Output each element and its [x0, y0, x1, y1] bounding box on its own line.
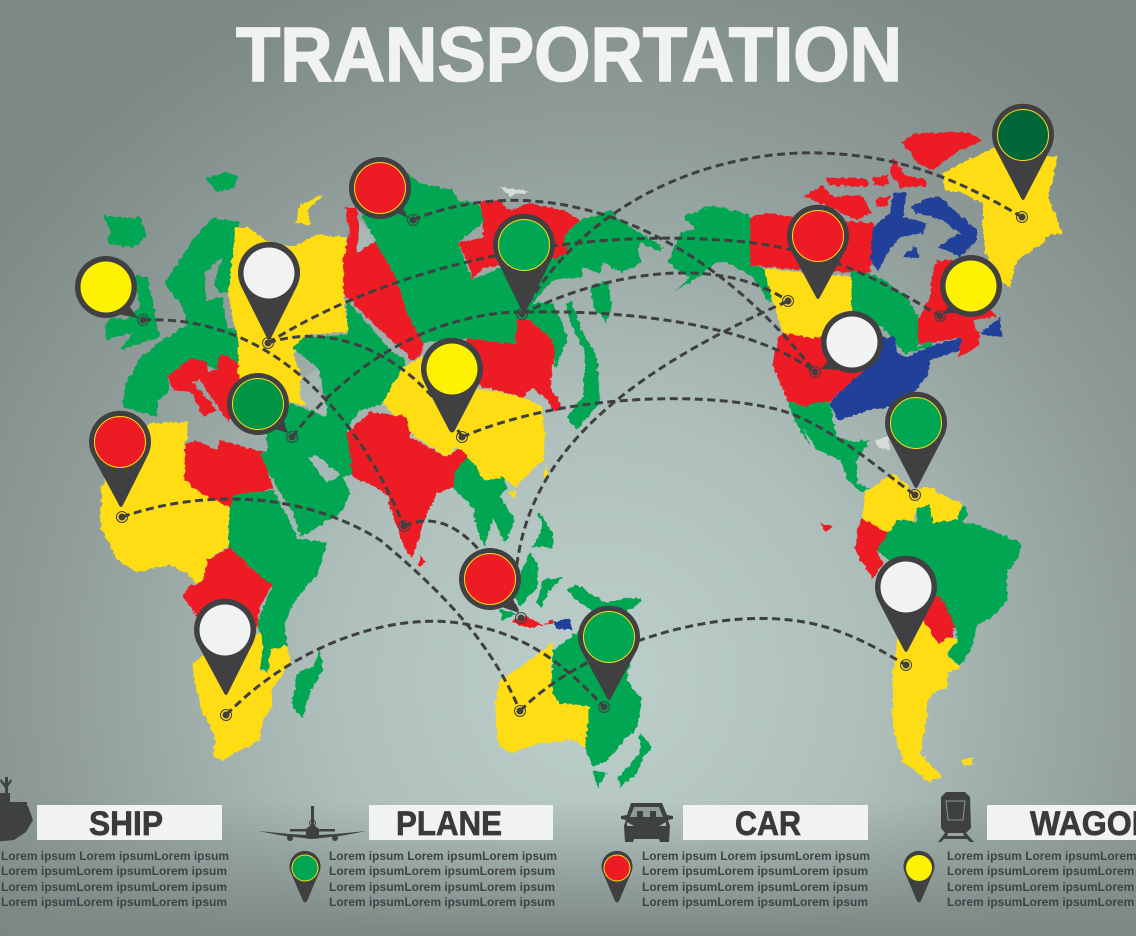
text block: car: Lorem ipsumLorem ipsumLorem ipsum: [642, 895, 868, 909]
pin: yellow Quebec: [940, 255, 1002, 317]
region: Australia west yellow: [495, 642, 590, 753]
region: Peru red: [821, 518, 888, 580]
route lines: [122, 153, 1022, 715]
pin: red legend: [601, 851, 632, 902]
pin: green Russia: [493, 214, 555, 313]
region: USA east blue: [830, 337, 962, 420]
region: USA west red: [773, 333, 867, 407]
region: Mexico green: [787, 400, 870, 493]
pin: red Indonesia: [459, 548, 521, 613]
region: Indonesia and islands: [500, 463, 642, 630]
region: Brazil green: [877, 505, 1020, 667]
legend: ship: [0, 777, 229, 909]
title: TRANSPORTATION: [236, 12, 902, 98]
text block: ship: Lorem ipsumLorem ipsumLorem ipsum: [1, 895, 227, 909]
region: North Africa red: [185, 440, 273, 508]
text block: car: Lorem ipsumLorem ipsumLorem ipsum: [642, 864, 868, 878]
pin: white South America: [875, 556, 937, 652]
text block: plane: Lorem ipsumLorem ipsumLorem ipsum: [329, 864, 555, 878]
region: Canada central yellow: [763, 268, 853, 338]
region: Siberia and Far East green: [362, 160, 663, 370]
region: southern Europe red: [167, 353, 240, 422]
pin: red Canada: [787, 205, 849, 299]
region: Southern Africa yellow: [193, 633, 291, 760]
region: Greenland yellow: [942, 148, 1062, 288]
text block: ship: [1, 849, 229, 909]
region: Canada west red: [750, 213, 875, 273]
region: China red: [450, 320, 563, 413]
icon: plane: [258, 806, 367, 841]
icon: car: [621, 803, 673, 842]
icon: ship: [0, 777, 33, 842]
legend: car: [601, 803, 870, 909]
region: western Europe green: [123, 297, 238, 417]
pin: white USA: [821, 311, 883, 373]
region: Iceland and Svalbard: [103, 172, 238, 248]
region: pale islands: [500, 187, 890, 450]
region: Bolivia red: [923, 595, 955, 643]
region: Central Asia yellow: [383, 350, 545, 487]
pin: green legend: [289, 851, 320, 902]
text block: plane: [329, 849, 557, 909]
pin: green Australia: [578, 606, 640, 700]
region: Middle East green: [260, 300, 407, 537]
region: Southeast Asia green: [453, 457, 515, 547]
region: Maritime blue: [980, 317, 1002, 337]
text block: plane: Lorem ipsumLorem ipsumLorem ipsum: [329, 880, 555, 894]
pin: white Scandinavia: [238, 242, 300, 340]
text block: car: Lorem ipsum Lorem ipsumLorem ipsum: [642, 849, 870, 863]
pin: yellow legend: [903, 851, 934, 902]
region: Canada east green: [851, 270, 933, 354]
region: India red: [347, 412, 468, 567]
pin: dark green Europe: [227, 373, 289, 435]
legend: wagon: [903, 792, 1136, 909]
region: Arctic islands blue: [870, 192, 977, 272]
icon: train: [938, 792, 974, 842]
label bar: plane: [369, 805, 553, 843]
region: northern South America yellow: [862, 473, 962, 543]
pin: yellow Britain: [75, 256, 138, 318]
region: East Siberia red: [458, 200, 580, 280]
region: Madagascar: [292, 650, 323, 717]
region: Central Africa red: [183, 547, 272, 653]
text block: wagon: [947, 849, 1136, 909]
label bar: car: [683, 805, 868, 843]
text block: ship: Lorem ipsumLorem ipsumLorem ipsum: [1, 880, 227, 894]
text block: plane: Lorem ipsumLorem ipsumLorem ipsum: [329, 895, 555, 909]
region: Quebec red: [918, 260, 997, 358]
region: White Sea water: [357, 220, 377, 253]
label bar: plane: PLANE: [396, 805, 502, 843]
region: Arctic islands red: [803, 132, 983, 220]
pin: red north: [349, 157, 411, 219]
region: western Russia yellow: [228, 227, 348, 407]
text block: car: Lorem ipsumLorem ipsumLorem ipsum: [642, 880, 868, 894]
text block: ship: Lorem ipsum Lorem ipsumLorem ipsum: [1, 849, 229, 863]
text block: car: [642, 849, 870, 909]
region: Russia band red: [343, 207, 423, 362]
region: Sakhalin and Japan green: [565, 280, 612, 430]
pin: dark green Greenland: [992, 104, 1054, 200]
pin: red Africa: [89, 411, 151, 507]
text block: ship: Lorem ipsumLorem ipsumLorem ipsum: [1, 864, 227, 878]
legend: plane: [258, 805, 557, 909]
region: Australia east green: [552, 630, 652, 788]
region: East Africa green: [228, 490, 327, 673]
region: Black Sea and Gulf water: [300, 368, 340, 483]
pin: green Caribbean: [885, 392, 947, 488]
route endpoints: [116, 212, 1028, 720]
region: Scandinavia: [165, 218, 240, 317]
label bar: car: CAR: [735, 805, 801, 843]
region: Northwest Africa yellow: [100, 422, 230, 585]
pin: white Southern Africa: [194, 599, 256, 695]
label bar: ship: SHIP: [89, 805, 163, 843]
pin: yellow Asia: [421, 338, 483, 432]
text block: plane: Lorem ipsum Lorem ipsumLorem ipsum: [329, 849, 557, 863]
region: Alaska green: [668, 205, 773, 303]
region: Novaya Zemlya: [295, 195, 323, 225]
region: southern South America yellow: [892, 620, 973, 782]
label bar: ship: [37, 805, 222, 843]
world map: [100, 132, 1062, 788]
region: Britain: [105, 275, 160, 350]
